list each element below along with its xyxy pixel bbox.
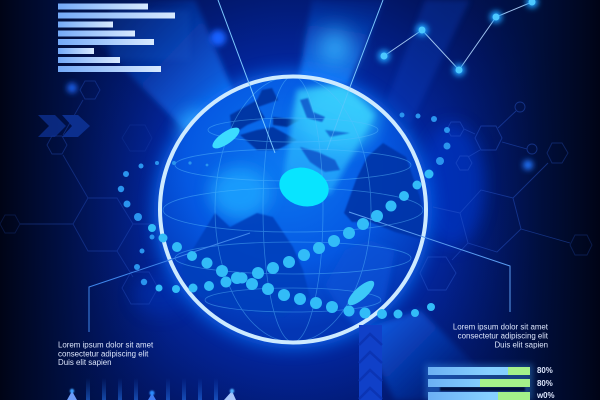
text block right xyxy=(453,322,549,350)
bar chart top-left xyxy=(58,4,190,72)
text block right: Lorem ipsum dolor sit amet xyxy=(453,322,549,332)
hexagon network: left xyxy=(0,81,160,304)
thin pointer lines xyxy=(89,0,510,332)
text block left: Lorem ipsum dolor sit amet xyxy=(58,340,154,350)
orbit dots xyxy=(118,112,451,319)
glow spots xyxy=(67,83,533,170)
progress bars bottom-right: w0% xyxy=(536,391,555,400)
continents xyxy=(180,88,425,330)
text block left: Duis elit sapien xyxy=(58,358,112,367)
text block right: Duis elit sapien xyxy=(494,340,548,350)
globe xyxy=(160,76,426,342)
light beams behind globe xyxy=(55,0,510,400)
chevron column bottom xyxy=(359,325,382,400)
text block right: consectetur adipiscing elit xyxy=(458,332,549,340)
globe ring xyxy=(160,76,426,342)
text block left: consectetur adipiscing elit xyxy=(58,350,149,358)
spike chart bottom-left xyxy=(67,378,236,400)
line chart top-right xyxy=(378,0,538,76)
hexagon network: right xyxy=(420,102,592,290)
chevrons top-left xyxy=(38,115,90,137)
progress bars bottom-right xyxy=(425,364,555,400)
progress bars bottom-right: 80% xyxy=(537,379,553,388)
spotlight beam and cyan wash on globe xyxy=(283,84,378,195)
bright ellipses xyxy=(209,124,378,309)
progress bars bottom-right: 80% xyxy=(537,366,553,375)
text block left xyxy=(58,340,154,367)
globe grid lines xyxy=(163,76,423,342)
